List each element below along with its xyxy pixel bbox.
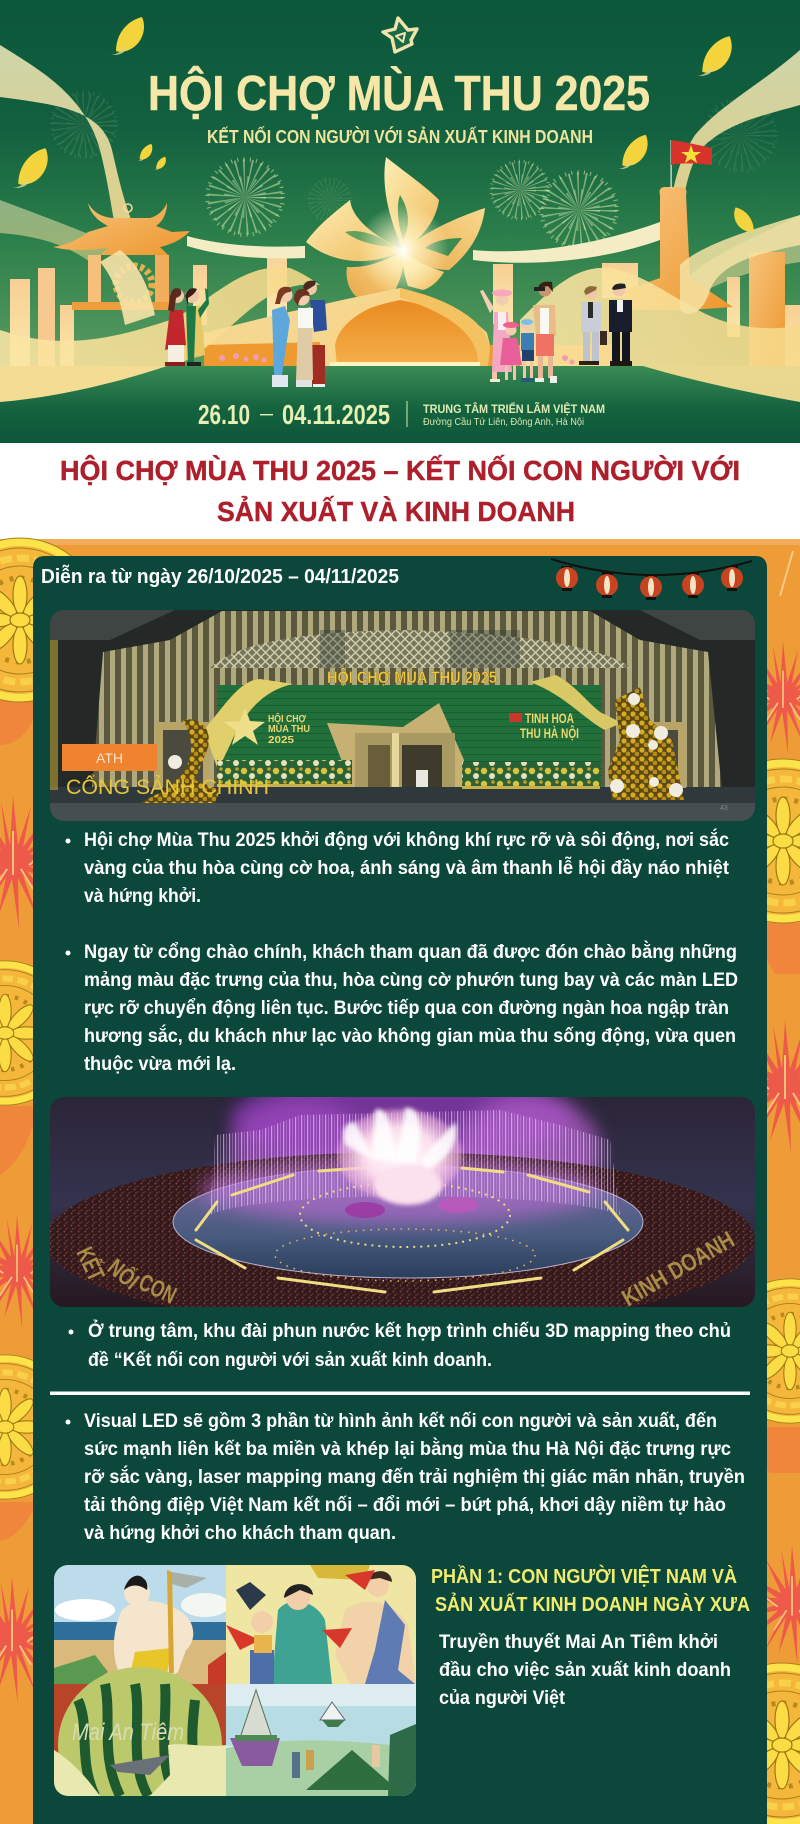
logo star	[383, 18, 417, 52]
person: girl in blue overalls	[272, 287, 292, 387]
lantern 1	[556, 566, 578, 591]
text block: opening paragraphs: rực rỡ chuyển động liên tục. Bước tiếp qua con đường ngàn hoa ngập tràn	[84, 997, 729, 1019]
person: woman in red ao dai	[165, 288, 186, 366]
title: HỘI CHỢ MÙA THU 2025	[148, 66, 650, 121]
text block: visual LED: Visual LED sẽ gồm 3 phần từ hình ảnh kết nối con người và sản xuất, đến	[84, 1410, 717, 1432]
text block: fountain description: đề “Kết nối con người với sản xuất kinh doanh.	[88, 1349, 492, 1371]
flower bed text: CON	[134, 1269, 180, 1309]
text block: opening paragraphs: thuộc vừa mới lạ.	[84, 1053, 236, 1075]
event dates	[198, 404, 390, 424]
gate left text: MÙA THU	[268, 722, 310, 735]
panel: watermelon with title: Mai An Tiêm	[72, 1719, 184, 1746]
horizontal ribbons	[187, 222, 660, 263]
gate opening	[327, 703, 464, 787]
LED segments	[196, 1166, 628, 1292]
photo: fountain with 3D mapping	[45, 1070, 755, 1328]
flower bed ring	[45, 1152, 755, 1328]
divider and venue: TRUNG TÂM TRIỂN LÃM VIỆT NAM	[423, 403, 605, 416]
ground ribbons	[0, 366, 800, 402]
flower planters	[217, 760, 352, 784]
panel: watermelon with title	[54, 1667, 226, 1823]
heading: part 1: PHẦN 1: CON NGƯỜI VIỆT NAM VÀ	[431, 1564, 737, 1588]
flying yellow petals	[12, 17, 758, 234]
flag tower	[625, 140, 733, 310]
illustration collage: Mai An Tiem	[54, 1565, 416, 1823]
big flower star	[306, 157, 485, 297]
gate right text: THU HÀ NỘI	[520, 724, 579, 741]
person: boy in blue vest	[521, 319, 534, 382]
ribbons upper	[0, 45, 800, 300]
gate right text	[509, 710, 579, 741]
text block: visual LED: tải thông điệp Việt Nam kết nối – đổi mới – bứt phá, khơi dậy niềm tự hào	[84, 1494, 726, 1516]
text block: visual LED	[66, 1410, 745, 1544]
flower bed text: KINH DOANH	[618, 1226, 739, 1312]
divider and venue: Đường Cầu Tứ Liên, Đông Anh, Hà Nội	[423, 416, 584, 428]
flower bed text	[71, 1226, 739, 1312]
event dates: 04.11.2025	[282, 399, 390, 430]
divider and venue	[406, 401, 605, 428]
lantern 2	[596, 572, 618, 598]
person: woman in green ao dai	[185, 288, 209, 366]
lantern 3	[640, 574, 662, 600]
dark green content panel	[33, 556, 767, 1824]
ATH label	[62, 744, 157, 771]
skyline	[10, 247, 800, 366]
person: businessman in grey suit	[579, 286, 607, 365]
lantern 4	[682, 572, 704, 598]
heading: part 1: SẢN XUẤT KINH DOANH NGÀY XƯA	[435, 1593, 750, 1616]
panel: family eating watermelon	[226, 1565, 416, 1684]
gate left text	[268, 712, 310, 743]
right side decoration	[700, 551, 800, 1824]
text block: visual LED: sức mạnh liên kết ba miền và khép lại bằng mùa thu Hà Nội đặc trưng rực	[84, 1436, 731, 1460]
section divider	[50, 1392, 750, 1395]
gate logo star	[224, 708, 265, 745]
person: man with binoculars	[533, 282, 557, 383]
text block: part 1 description: của người Việt	[439, 1687, 565, 1709]
text block: opening paragraphs: mảng màu đặc trưng của thu, hòa cùng cờ phướn tung bay và các màn LED	[84, 969, 738, 991]
text block: opening paragraphs: hương sắc, du khách như lạc vào không gian mùa thu sống động, vừa quen	[84, 1023, 736, 1047]
text block: opening paragraphs: Ngay từ cổng chào chính, khách tham quan đã được đón chào bằng những	[84, 939, 737, 963]
text block: visual LED: rỡ sắc vàng, laser mapping mang đến trải nghiệm thị giác mãn nhãn, truyền	[84, 1464, 745, 1488]
ground	[0, 366, 800, 443]
gate right text: TINH HOA	[525, 710, 574, 726]
text block: opening paragraphs: vàng của thu hòa cùng cờ hoa, ánh sáng và âm thanh lễ hội đầy náo nhiệt	[84, 855, 729, 879]
panel: boat trading at sea	[226, 1684, 416, 1796]
lantern string	[551, 559, 752, 600]
text block: opening paragraphs: và hứng khởi.	[84, 885, 201, 907]
orange patterned background	[0, 538, 800, 1824]
cream wave ribbons	[0, 215, 800, 366]
text block: part 1 description: đầu cho việc sản xuất kinh doanh	[439, 1659, 731, 1681]
fireworks	[52, 93, 776, 248]
slide number: 43	[720, 805, 728, 812]
pagoda	[53, 203, 190, 310]
flower bed text: NỐI	[102, 1253, 145, 1295]
text block: visual LED: và hứng khởi cho khách tham quan.	[84, 1522, 396, 1544]
lantern 5	[721, 566, 743, 591]
gate left text: HỘI CHỢ	[268, 712, 306, 725]
inner dotted ring	[300, 1183, 510, 1247]
person: girl in pink skirt	[500, 322, 522, 380]
subtitle: KẾT NỐI CON NGƯỜI VỚI SẢN XUẤT KINH DOANH	[207, 126, 593, 147]
main heading: SẢN XUẤT VÀ KINH DOANH	[217, 495, 575, 527]
gate banner title: HỘI CHỢ MÙA THU 2025	[327, 668, 497, 687]
date line: Diễn ra từ ngày 26/10/2025 – 04/11/2025	[41, 564, 399, 588]
gold swoops	[204, 679, 293, 770]
panel: man digging on the beach	[54, 1565, 229, 1684]
main entrance caption: CỔNG SẢNH CHÍNH	[66, 775, 269, 799]
person: woman in pink dress	[480, 290, 512, 382]
text block: fountain description: Ở trung tâm, khu đài phun nước kết hợp trình chiếu 3D mapping theo chủ	[88, 1318, 731, 1342]
main heading	[60, 454, 740, 527]
person: woman in white top	[294, 289, 325, 387]
hero banner	[0, 0, 800, 443]
flowers at building base	[219, 353, 574, 364]
side entrances	[155, 722, 210, 788]
heading: part 1	[431, 1564, 750, 1616]
green gate	[217, 685, 602, 787]
main heading: HỘI CHỢ MÙA THU 2025 – KẾT NỐI CON NGƯỜI VỚI	[60, 454, 740, 486]
ATH label: ATH	[96, 750, 123, 766]
text block: part 1 description: Truyền thuyết Mai An Tiêm khởi	[439, 1631, 718, 1653]
left side decoration	[0, 538, 102, 1703]
exhibition building	[204, 288, 612, 366]
flower bed text: KẾT	[71, 1243, 110, 1286]
text block: fountain description	[68, 1318, 731, 1371]
text block: part 1 description	[439, 1631, 731, 1709]
water basin	[173, 1166, 643, 1278]
person: man in navy jacket	[303, 281, 327, 385]
event dates: 26.10	[198, 399, 250, 430]
gate left text: 2025	[268, 734, 294, 746]
flower columns	[608, 687, 684, 800]
light lotus	[338, 1108, 478, 1218]
text block: opening paragraphs: Hội chợ Mùa Thu 2025 khởi động với không khí rực rỡ và sôi động, nơi sắc	[84, 827, 729, 851]
person: businessman in black suit	[609, 284, 632, 366]
photo: main entrance gate	[50, 610, 755, 821]
text block: opening paragraphs	[66, 827, 738, 1075]
water jets	[210, 1110, 620, 1215]
